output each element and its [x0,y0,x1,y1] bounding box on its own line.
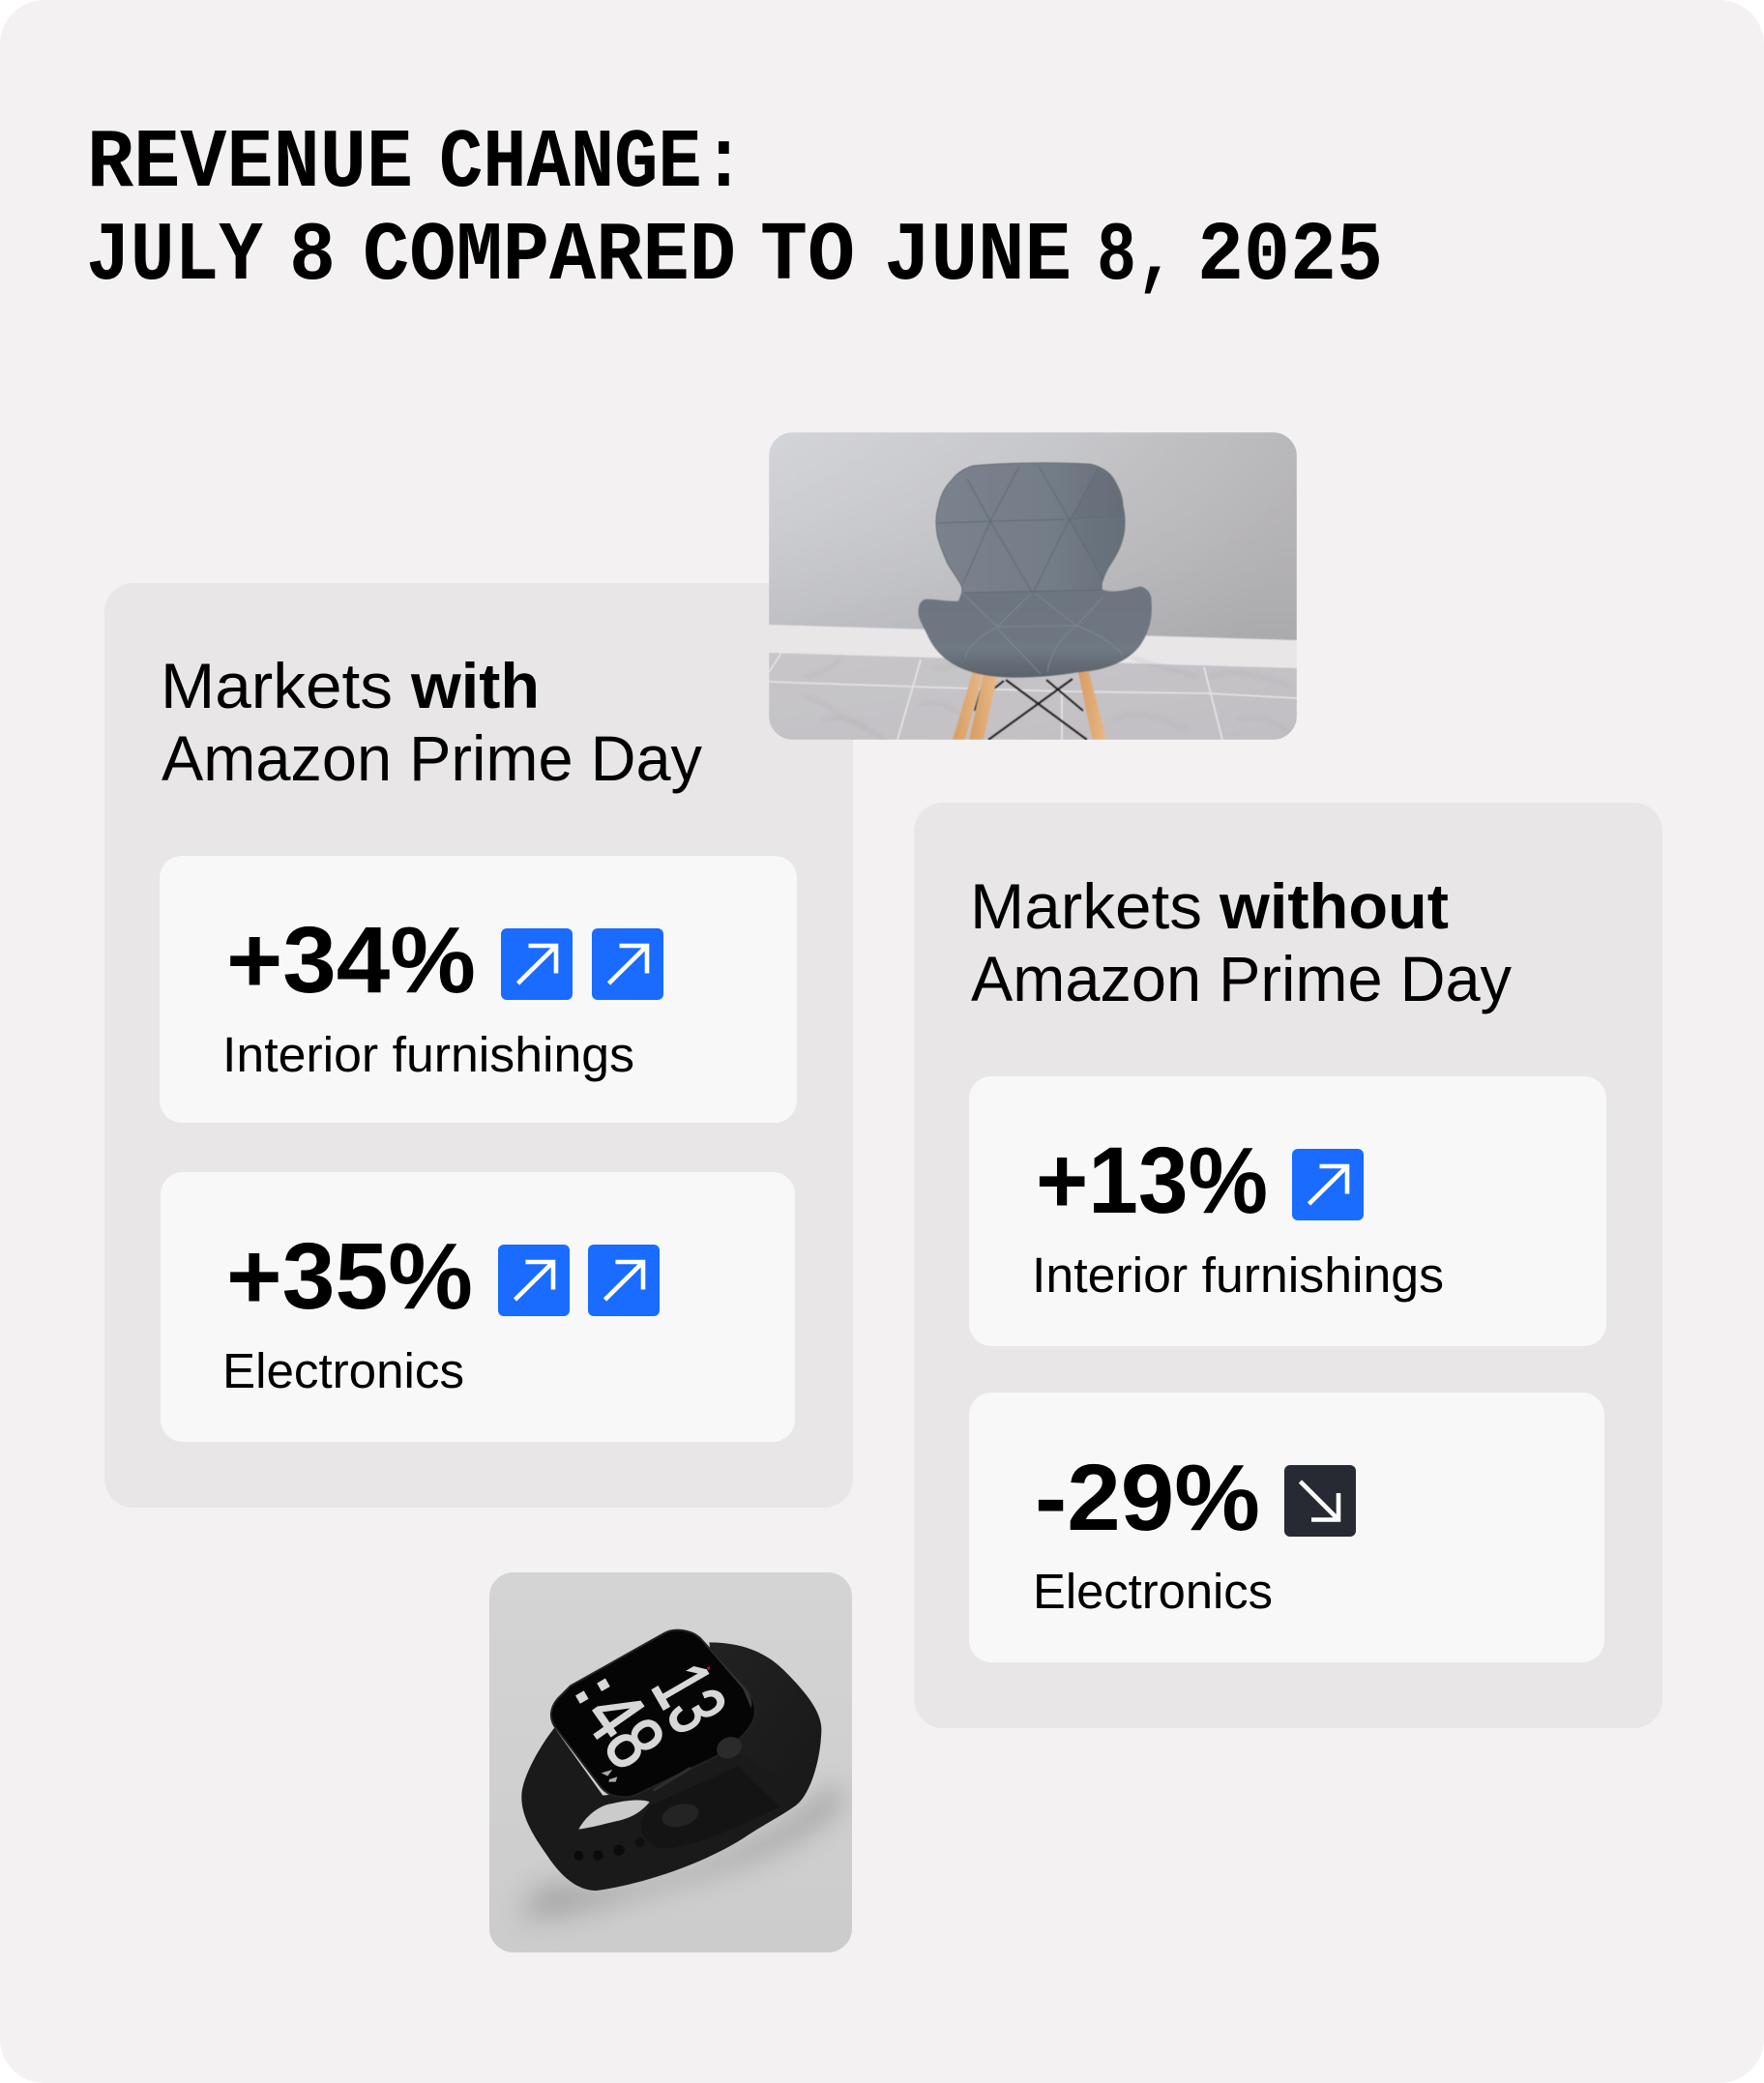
card: interior furnishings +13% [969,1076,1606,1346]
label: electronics: Electronics [222,1343,464,1398]
title: 8 [289,209,336,304]
heading: markets with: Amazon Prime Day [162,722,702,794]
title: JUNE [884,209,1072,304]
icon: down arrow [1284,1465,1356,1537]
heading: markets with: with [410,650,540,721]
photo: grey chair [769,432,1297,740]
title: REVENUE [87,116,413,211]
label: interior furnishings: Interior furnishings [1032,1247,1444,1303]
heading: markets without: without [1219,870,1449,942]
panel: markets with Amazon Prime Day [104,583,853,1508]
icon: double up arrows [498,1245,660,1316]
title: 2025 [1197,209,1383,304]
title: TO [760,209,855,304]
title: CHANGE: [439,116,746,211]
watch band [521,1642,821,1891]
photo: black smartwatch [489,1572,852,1952]
icon: up arrow [1292,1149,1364,1220]
label: electronics: Electronics [1033,1564,1273,1619]
value +35%: +35% [226,1223,473,1329]
card: interior furnishings +34% [160,856,797,1123]
value +13%: +13% [1036,1128,1268,1233]
label: interior furnishings: Interior furnishings [222,1027,634,1082]
watch case and screen [551,1630,755,1797]
value +34%: +34% [226,907,476,1012]
heading: markets without: Amazon Prime Day [971,943,1512,1014]
heading: markets with: Markets [161,650,393,721]
title: 8, [1097,209,1176,304]
icon: double up arrows [501,928,663,1000]
card: electronics -29% [969,1393,1604,1662]
value -29%: -29% [1035,1445,1260,1550]
title: JULY [86,209,263,304]
watch shadow [522,1782,844,1918]
title: COMPARED [363,209,736,304]
panel: markets without Amazon Prime Day [914,803,1662,1728]
watch case and screen: 48 [568,1674,683,1783]
heading: markets without: Markets [970,870,1202,942]
watch case and screen: 13 [635,1649,745,1746]
watch case and screen: : [565,1665,629,1712]
card: electronics +35% [161,1172,795,1442]
